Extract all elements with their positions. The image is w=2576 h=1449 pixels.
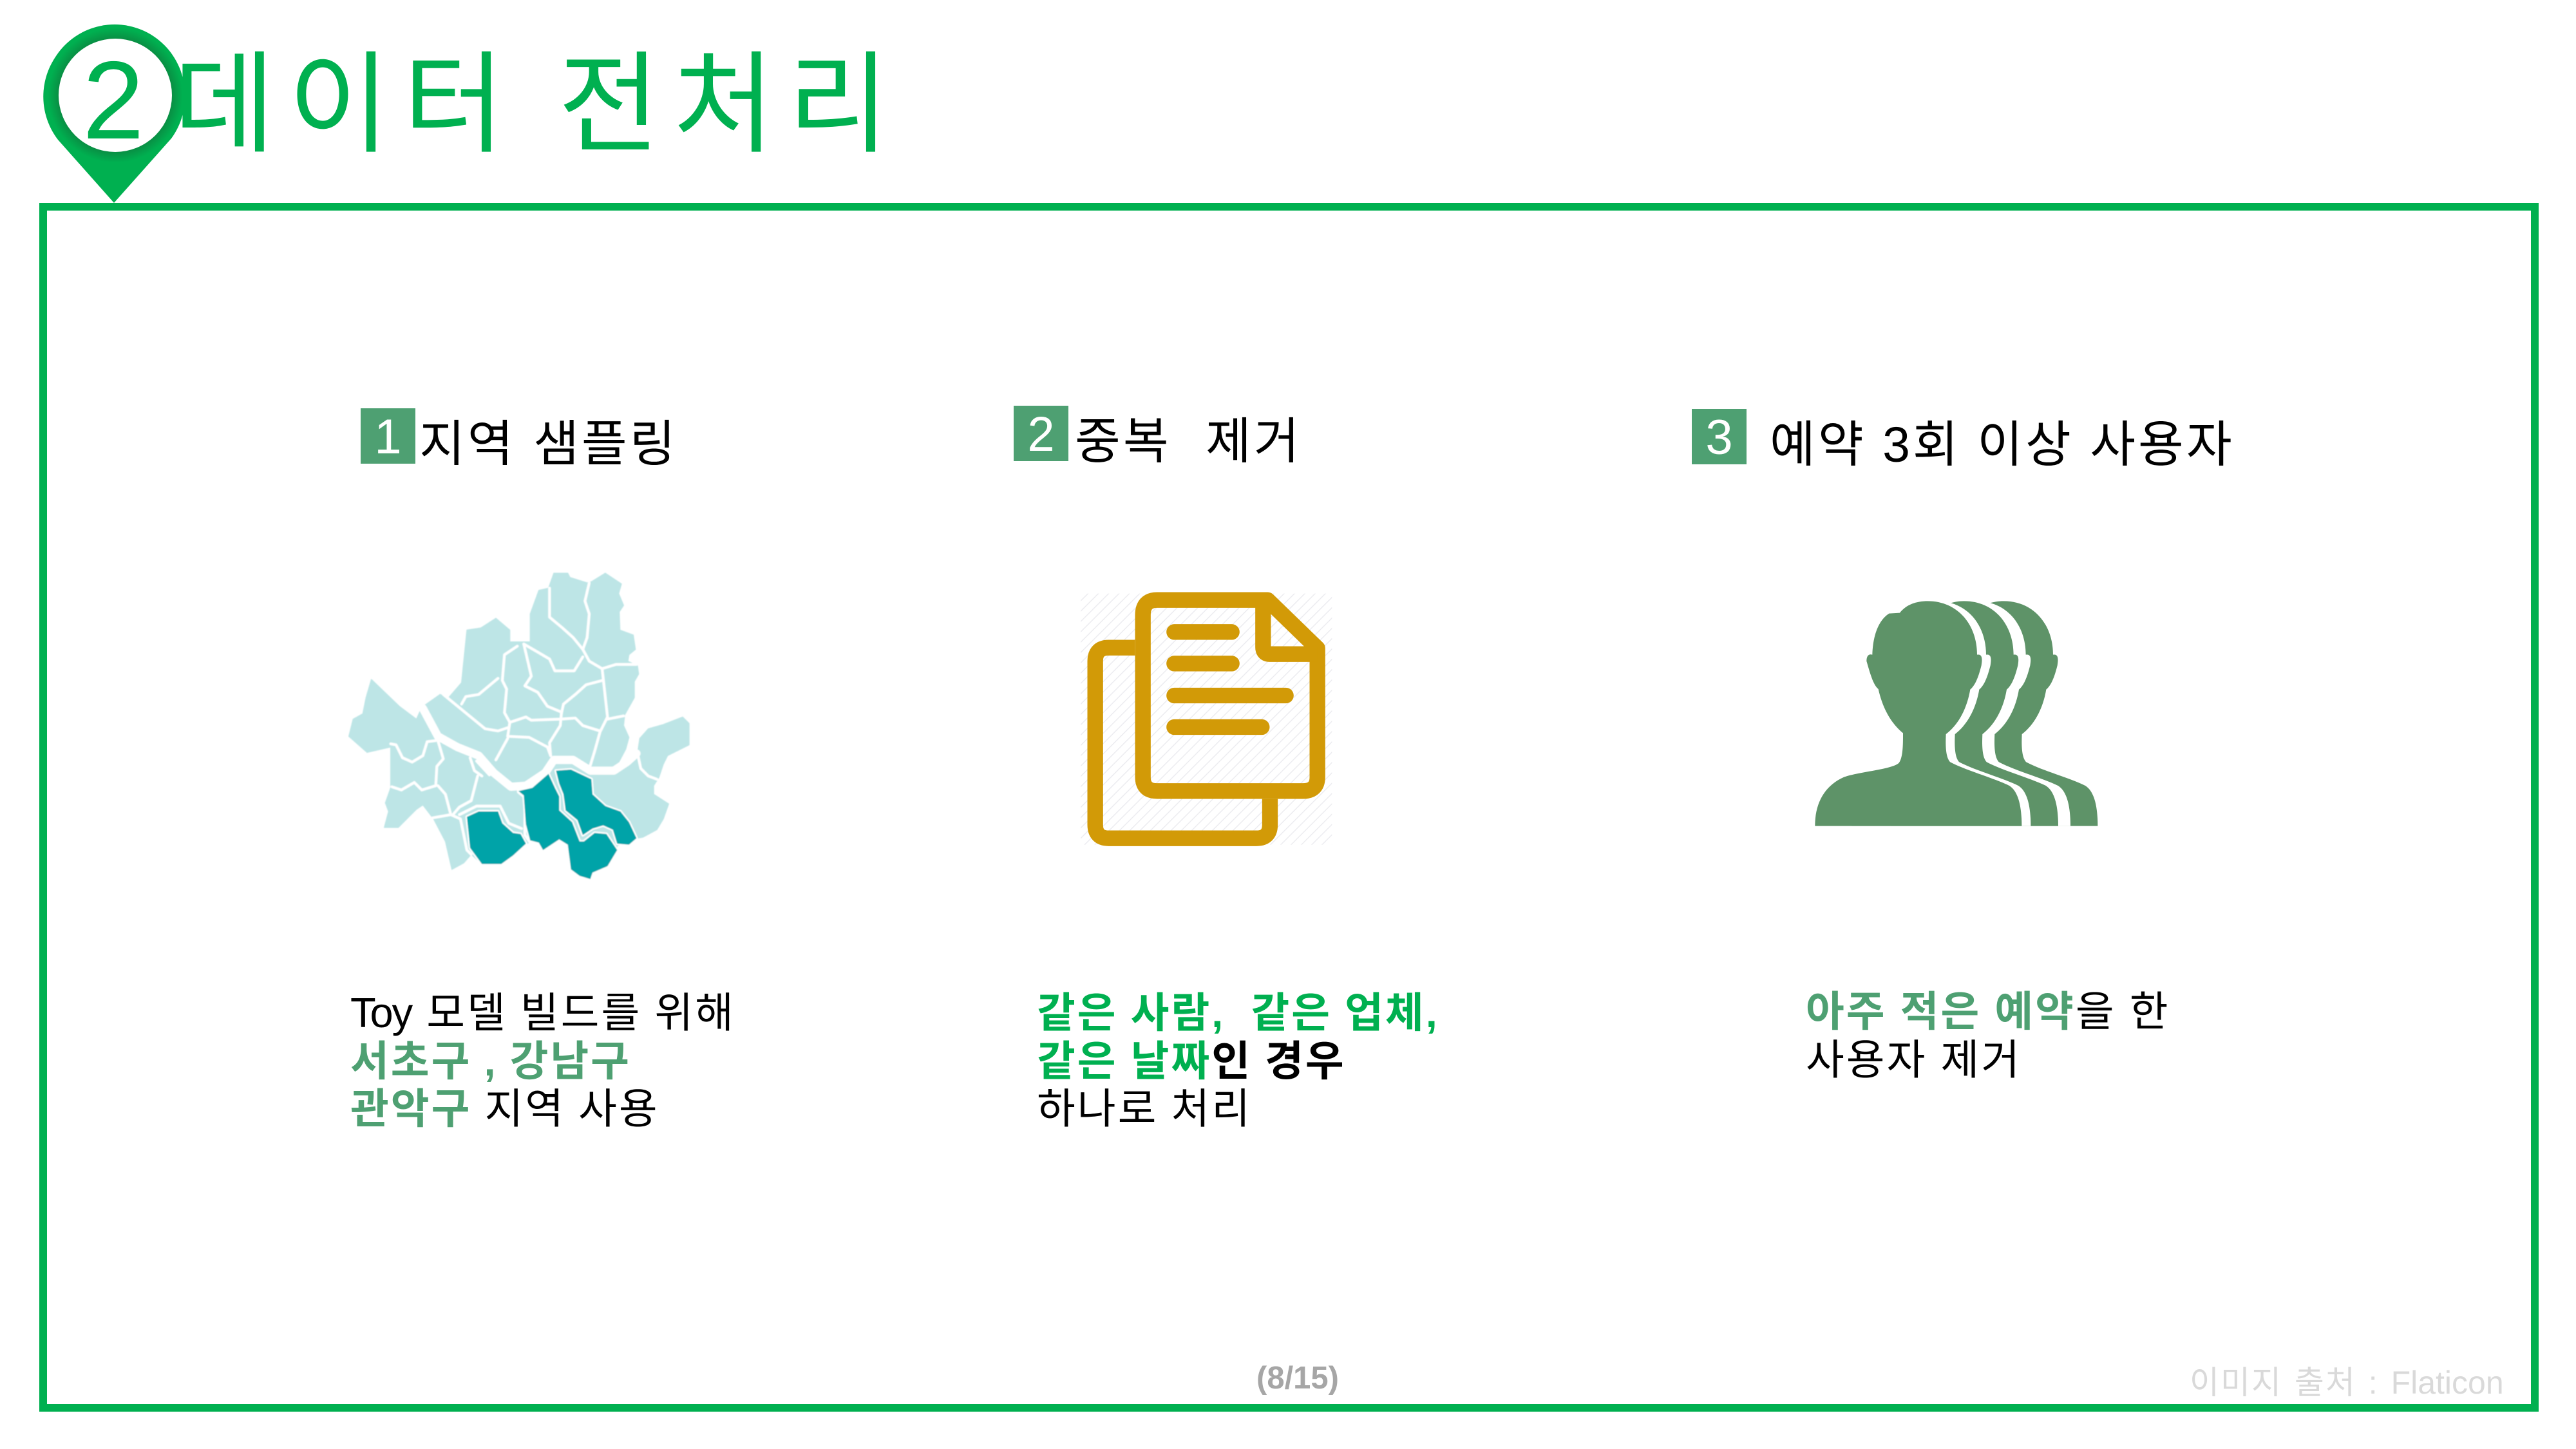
page number: (8/15) bbox=[1256, 1361, 1339, 1396]
step 1 description: Toy 모델 빌드를 위해 bbox=[350, 989, 735, 1036]
step 3 description: 사용자 제거 bbox=[1806, 1036, 2022, 1083]
step 3 number badge: 3 bbox=[1705, 410, 1733, 465]
step 1 number badge: 1 bbox=[374, 410, 402, 464]
step 3 number badge bbox=[1692, 409, 1747, 464]
icon: Seoul district map bbox=[348, 572, 690, 880]
step 2 description bbox=[1037, 989, 1439, 1132]
step 3 description: 아주 적은 예약을 한 bbox=[1806, 988, 2170, 1035]
icon: duplicate documents bbox=[1081, 592, 1332, 846]
step 2 heading: 중복 제거 bbox=[1075, 414, 1302, 469]
icon: three user silhouettes bbox=[1815, 601, 2098, 826]
step 2 number badge: 2 bbox=[1027, 407, 1055, 462]
step 2 description: 같은 날짜인 경우 bbox=[1037, 1037, 1346, 1084]
image credit: 이미지 출처 : Flaticon bbox=[2190, 1365, 2504, 1401]
step 1 number badge bbox=[361, 408, 415, 464]
step 3 heading: 예약 3회 이상 사용자 bbox=[1770, 417, 2235, 473]
icon: location pin with number 2 bbox=[43, 24, 183, 203]
step 1 description: 서초구 , 강남구 bbox=[350, 1037, 631, 1084]
step 2 description: 하나로 처리 bbox=[1037, 1085, 1252, 1132]
icon: location pin with number 2: 2 bbox=[82, 39, 144, 162]
step 1 description: 관악구 지역 사용 bbox=[350, 1085, 659, 1132]
step 1 description bbox=[350, 989, 735, 1132]
step 1 heading: 지역 샘플링 bbox=[419, 417, 678, 472]
step 2 description: 같은 사람, 같은 업체, bbox=[1037, 989, 1439, 1036]
step 3 description bbox=[1806, 988, 2170, 1083]
title: 데이터 전처리 bbox=[173, 43, 902, 167]
step 2 number badge bbox=[1014, 406, 1068, 461]
